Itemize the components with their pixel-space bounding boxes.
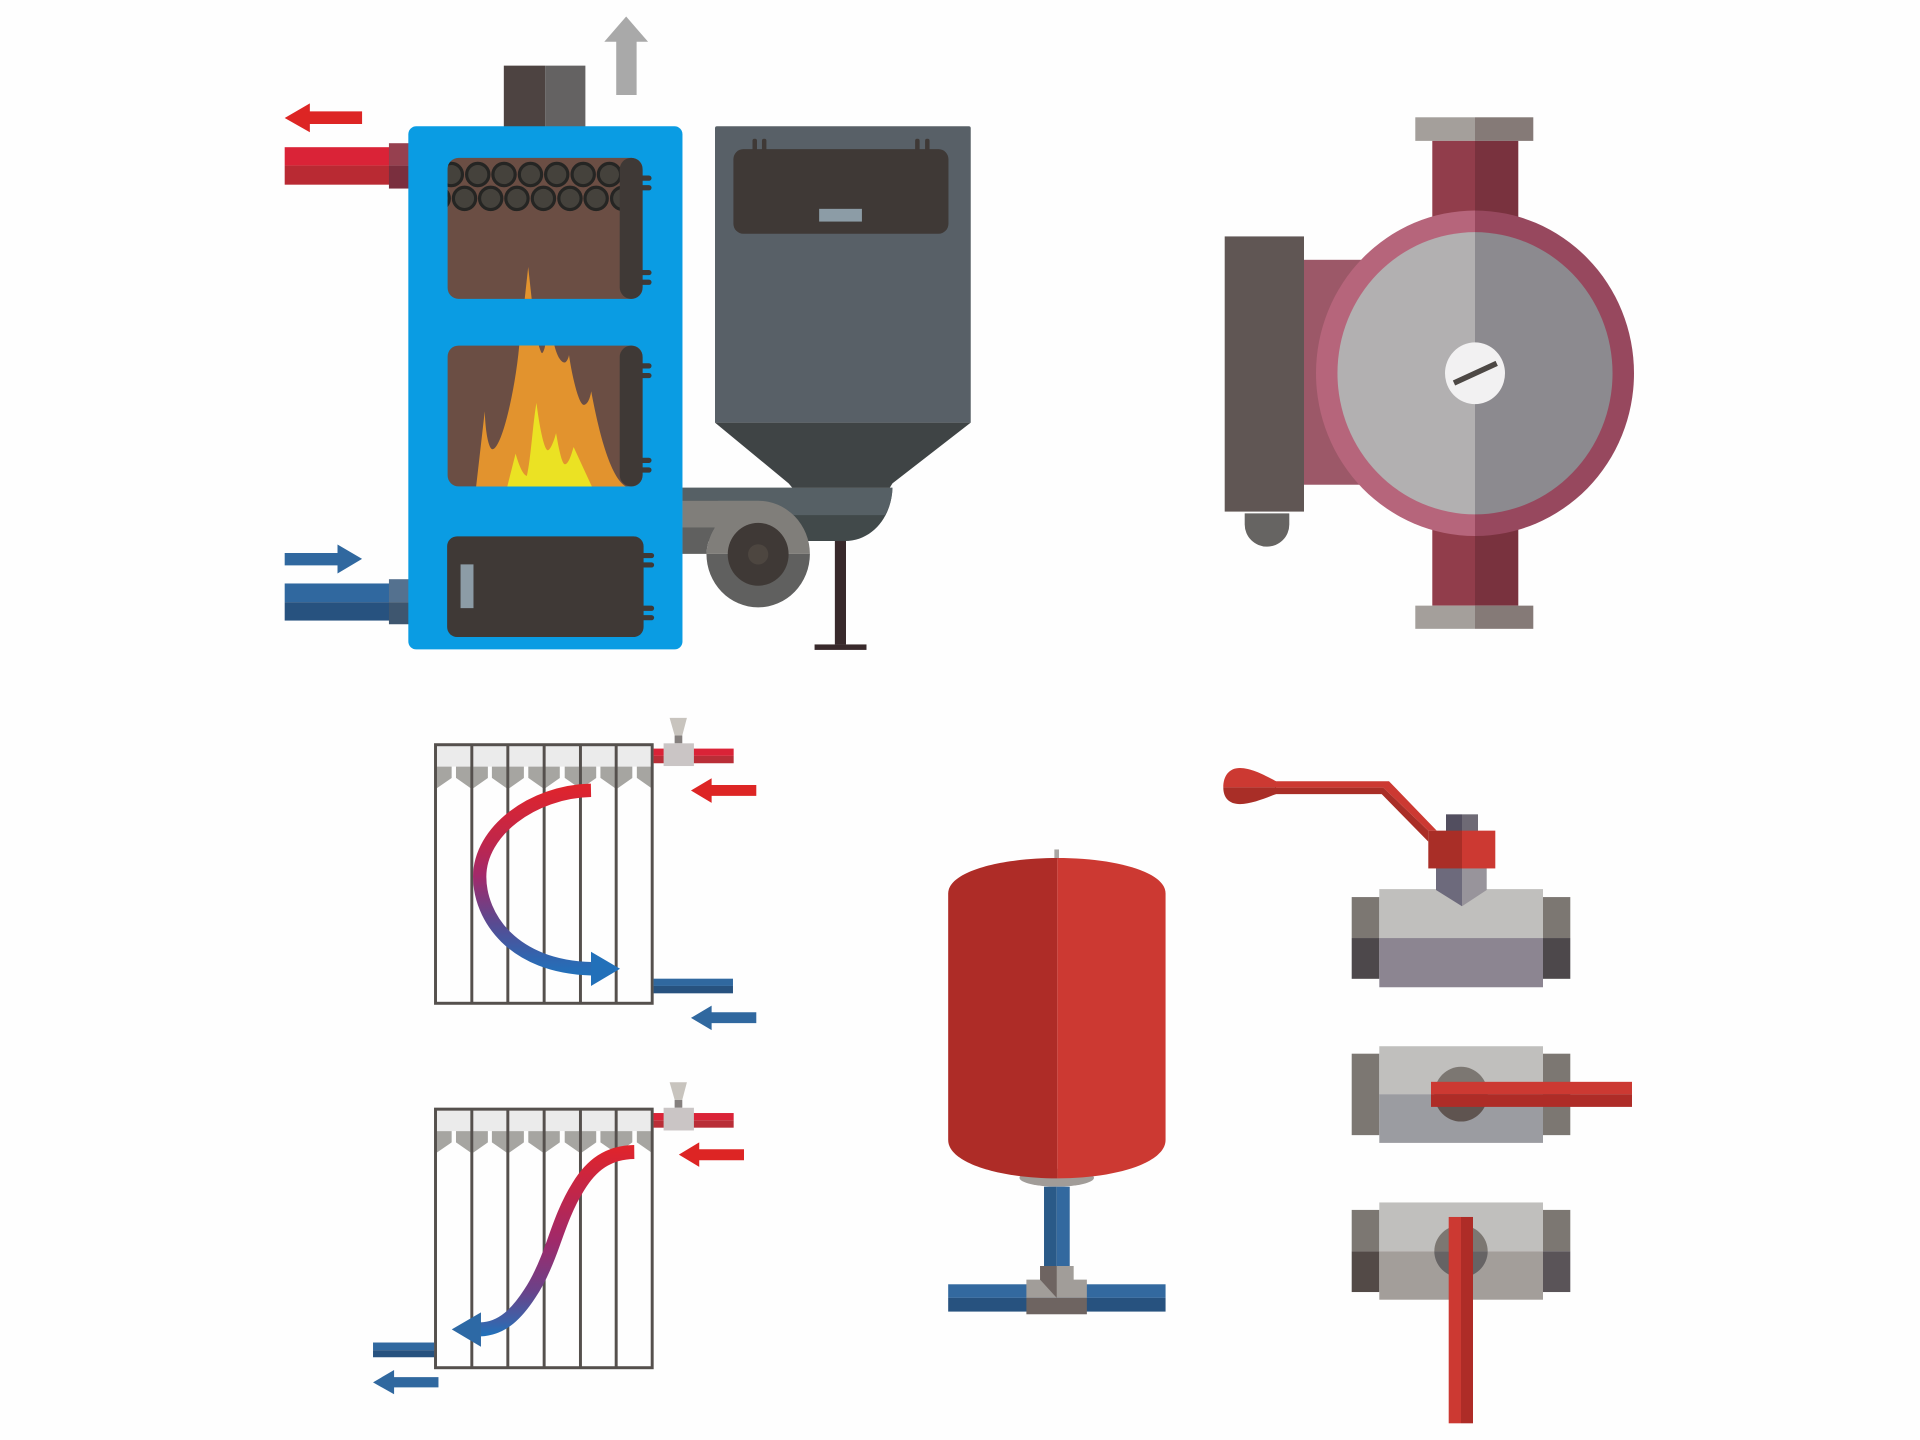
handle — [1449, 1217, 1473, 1423]
hopper funnel — [715, 423, 971, 488]
door plate — [461, 564, 473, 608]
right end — [1543, 897, 1570, 979]
window interior — [448, 346, 643, 486]
window interior — [448, 158, 643, 299]
small flame — [525, 267, 532, 299]
circulation pump — [1225, 117, 1634, 629]
door hinges — [640, 176, 652, 285]
door hinges — [640, 363, 652, 473]
spindle — [1434, 1067, 1488, 1122]
valve body — [1379, 1202, 1543, 1300]
radiator top diagram — [436, 718, 756, 1030]
base collar — [1019, 1169, 1094, 1187]
tank left half — [948, 858, 1057, 1178]
bottom flange — [1415, 606, 1533, 629]
valve stem — [675, 735, 682, 743]
right end — [1543, 1210, 1570, 1292]
ball valve side view — [1223, 768, 1570, 987]
motor cap — [1245, 513, 1289, 547]
stem pipe — [1044, 1187, 1070, 1267]
center screw — [1445, 342, 1505, 404]
chimney — [504, 66, 585, 127]
feed housing lower — [682, 528, 715, 554]
handle — [1431, 1082, 1632, 1107]
top firebox window — [427, 158, 652, 299]
hopper body — [715, 126, 971, 423]
tank right half — [1057, 858, 1166, 1178]
logs — [427, 163, 634, 210]
ball valves — [1223, 768, 1632, 1423]
stem — [1436, 864, 1487, 906]
left end — [1352, 897, 1379, 979]
arrow: cold water in — [285, 544, 362, 574]
valve head — [670, 1082, 687, 1100]
spindle — [1434, 1225, 1488, 1277]
section chevrons — [437, 1131, 652, 1153]
radiator frame — [436, 1109, 652, 1368]
fuel hopper — [715, 126, 971, 488]
orange flame — [476, 346, 626, 486]
valve body — [1379, 1046, 1543, 1143]
hinges — [641, 553, 654, 620]
left end — [1352, 1210, 1379, 1292]
door panel — [447, 536, 644, 637]
horizontal pipe — [948, 1284, 1166, 1312]
feed wheel lower — [706, 554, 810, 607]
ball valve closed top view — [1352, 1202, 1570, 1423]
top pin — [1054, 849, 1059, 859]
boiler assembly — [285, 17, 971, 650]
top band — [436, 1110, 652, 1131]
cold outlet pipe — [373, 1343, 434, 1357]
feed wheel center — [748, 544, 768, 564]
arrow: hot water out — [285, 103, 362, 132]
arrow: hot supply — [691, 778, 756, 803]
valve head — [670, 718, 687, 735]
boiler body — [408, 126, 682, 649]
flow curve — [480, 790, 592, 969]
red cap — [1428, 831, 1495, 868]
top flange — [1415, 117, 1533, 141]
valve stem — [675, 1100, 682, 1108]
expansion tank — [948, 849, 1166, 1314]
auger and feed housing — [682, 488, 892, 650]
nut — [1446, 814, 1478, 831]
door edge — [620, 346, 643, 486]
infographic canvas — [284, 16, 1634, 1424]
cold outlet pipe — [654, 979, 733, 993]
hot water pipe — [285, 143, 409, 189]
flow arrow head — [591, 952, 620, 986]
arrow: cold return — [691, 1006, 756, 1030]
auger tube highlight — [682, 488, 892, 515]
pump ring — [1316, 211, 1634, 536]
arrow: hot supply — [679, 1142, 744, 1167]
middle firebox window — [448, 346, 652, 486]
support leg — [815, 541, 866, 650]
end caps — [1352, 1054, 1570, 1135]
hot inlet pipe — [654, 1113, 734, 1128]
flow arrow head — [452, 1312, 481, 1347]
feed wheel hub — [728, 523, 789, 586]
arrow: cold return — [373, 1370, 438, 1394]
valve body — [1379, 889, 1543, 987]
cold water pipe — [285, 579, 409, 624]
lid label plate — [819, 209, 862, 222]
motor connector — [1304, 260, 1374, 485]
hopper tabs — [752, 139, 930, 153]
feed housing upper — [682, 501, 810, 554]
handle arm — [1275, 781, 1437, 842]
handle grip — [1223, 768, 1276, 804]
vertical pipe — [1432, 141, 1518, 606]
motor housing — [1225, 236, 1304, 512]
valve body — [664, 743, 694, 766]
valve body — [664, 1108, 694, 1130]
radiator bottom diagram — [373, 1082, 744, 1394]
top band — [436, 746, 652, 767]
ball valve open top view — [1352, 1046, 1632, 1143]
yellow flame — [507, 403, 592, 486]
screw slot — [1454, 363, 1497, 383]
hot inlet pipe — [654, 749, 734, 763]
ash door — [447, 536, 654, 637]
door edge — [620, 158, 643, 299]
hopper lid — [733, 149, 948, 234]
pump face — [1337, 232, 1613, 514]
auger tube — [682, 488, 892, 541]
radiator frame — [436, 745, 652, 1003]
section chevrons — [437, 767, 652, 788]
flow curve — [481, 1152, 634, 1329]
arrow: exhaust up — [604, 17, 648, 95]
tee fitting — [1026, 1266, 1087, 1314]
